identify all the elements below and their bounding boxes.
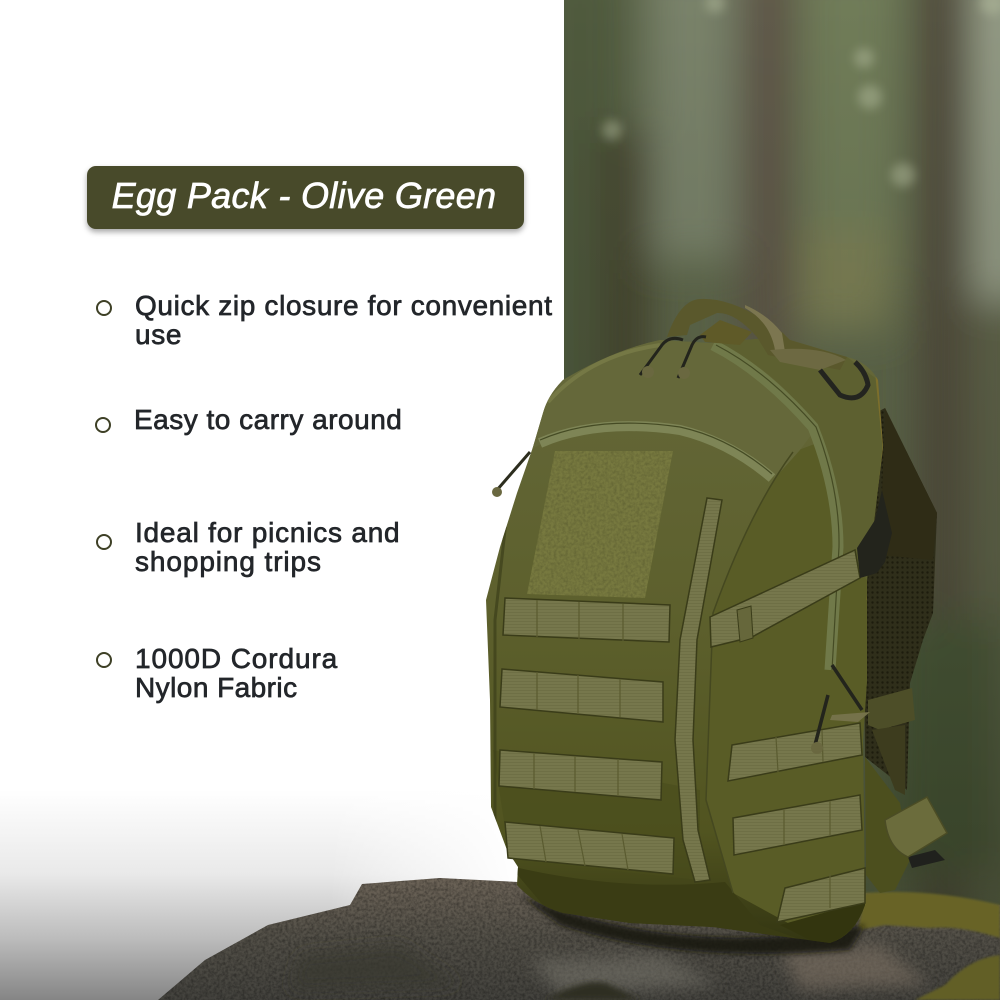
right gusset panel (717, 444, 878, 940)
bullet: picnics and shopping: shopping trips (135, 546, 322, 577)
moss (858, 892, 1000, 938)
title banner: Egg Pack - Olive Green (112, 175, 496, 216)
yellow edge (868, 377, 884, 600)
vertical strap (675, 498, 722, 882)
bullet: cordura nylon: 1000D Cordura (135, 643, 338, 674)
top zipper pulls (640, 337, 706, 379)
seam (706, 452, 793, 893)
bullet: picnics and shopping: Ideal for picnics and (135, 517, 400, 548)
right top gusset (715, 337, 883, 580)
main zipper (713, 345, 838, 670)
title banner (87, 166, 524, 229)
pocket zipper (540, 426, 772, 478)
side buckle (857, 490, 892, 578)
side compression strap (710, 550, 860, 647)
lower zipper pulls (811, 665, 870, 754)
bullet: quick zip closure: Quick zip closure for convenient (135, 290, 553, 321)
side strap keeper (737, 606, 753, 642)
bullet: quick zip closure: use (135, 319, 182, 350)
backpack body (486, 339, 883, 943)
upper panel (532, 352, 800, 472)
bullet: cordura nylon: Nylon Fabric (135, 672, 298, 703)
back panel with mesh (862, 408, 937, 795)
D-ring hook (820, 362, 868, 398)
velcro patch (527, 451, 673, 598)
bottom panel (518, 868, 762, 934)
rock (158, 878, 1000, 1000)
bullet: picnics and shopping (96, 517, 400, 578)
rim highlight (548, 345, 660, 402)
top handle (667, 299, 847, 370)
bottom fade on white panel (0, 790, 564, 1000)
bullet: easy to carry: Easy to carry around (134, 404, 402, 435)
strap tab with buckle (885, 797, 947, 868)
bullet: cordura nylon (96, 643, 338, 704)
MOLLE webbing rows (499, 498, 865, 922)
forest background (564, 0, 1000, 905)
side pocket (865, 757, 910, 893)
bullet: quick zip closure (96, 290, 553, 350)
webbing stitching (534, 600, 830, 908)
side zipper pull (492, 452, 530, 497)
